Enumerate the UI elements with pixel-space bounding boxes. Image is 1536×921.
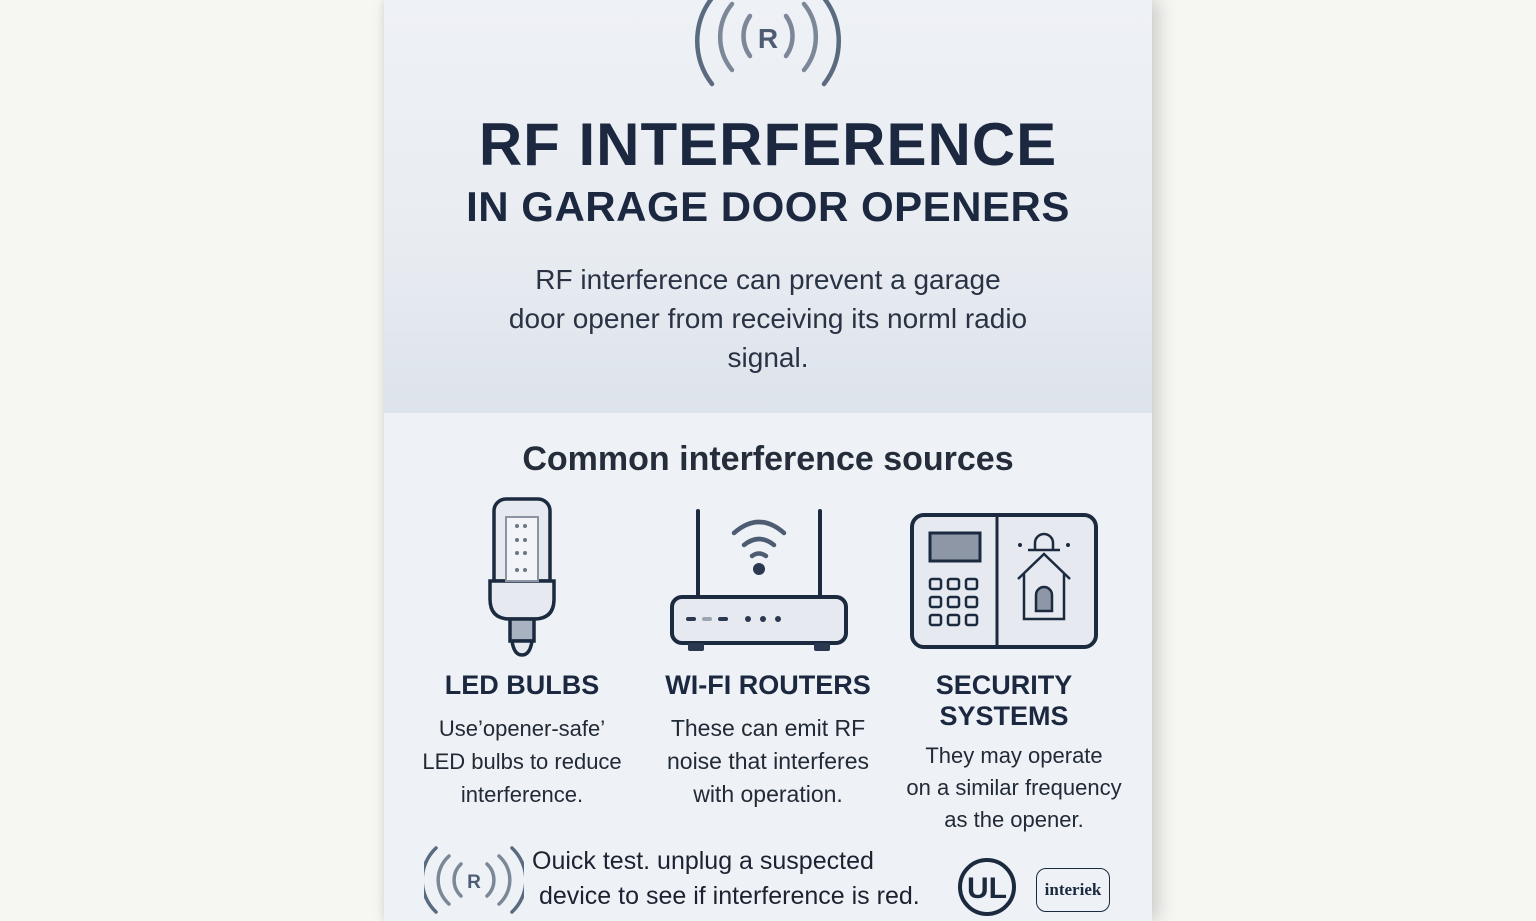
icon: security panel: [910, 513, 1098, 649]
text: Wi-Fi routers: These can emit RF: [671, 715, 865, 741]
text: LED bulbs: Use’opener-safe’: [439, 716, 605, 741]
title: IN GARAGE DOOR OPENERS: [466, 183, 1070, 230]
text: security systems: as the opener.: [944, 807, 1084, 832]
label: security systems: SYSTEMS: [939, 701, 1069, 731]
icon: router: [670, 509, 848, 651]
panel: main card: [384, 0, 1152, 921]
text: Wi-Fi routers: [667, 715, 869, 807]
label: LED bulbs: LED BULBS: [445, 670, 599, 700]
icon: UL logo: [958, 858, 1016, 916]
icon: UL logo: UL: [967, 872, 1007, 905]
text: security systems: They may operate: [925, 743, 1103, 768]
label: security systems: [936, 670, 1072, 731]
text: Wi-Fi routers: with operation.: [693, 781, 843, 807]
icon: small radio signal: [424, 846, 524, 914]
intro text: signal.: [728, 342, 808, 373]
text: quick test: device to see if interference is red.: [539, 882, 920, 910]
text: quick test: Ouick test. unplug a suspected: [532, 847, 874, 875]
icon: radio signal R: [695, 0, 841, 86]
column: Wi-Fi routers: [665, 509, 871, 807]
text: quick test: [532, 847, 920, 910]
intro text: door opener from receiving its norml radio: [509, 303, 1027, 334]
intro text: RF interference can prevent a garage: [535, 264, 1001, 295]
label: security systems: SECURITY: [936, 670, 1072, 700]
text: security systems: on a similar frequency: [906, 775, 1122, 800]
title: [466, 111, 1070, 230]
icon: intertek logo: [1036, 868, 1110, 912]
label: Wi-Fi routers: WI-FI ROUTERS: [665, 670, 871, 700]
text: LED bulbs: interference.: [461, 782, 583, 807]
text: security systems: [906, 743, 1122, 832]
heading: common sources: Common interference sources: [522, 440, 1014, 478]
text: Wi-Fi routers: noise that interferes: [667, 748, 869, 774]
text: LED bulbs: [422, 716, 622, 807]
callout: quick test: [424, 846, 1110, 916]
icon: radio signal R: R: [758, 23, 778, 54]
title: RF INTERFERENCE: [479, 111, 1057, 178]
intro text: [509, 264, 1027, 373]
icon: small radio signal: R: [467, 872, 481, 893]
column: LED bulbs: [422, 497, 622, 807]
text: LED bulbs: LED bulbs to reduce: [422, 749, 622, 774]
column: security systems: [906, 513, 1122, 832]
icon: intertek logo: interiek: [1045, 880, 1101, 899]
icon: LED bulb: [488, 497, 556, 657]
